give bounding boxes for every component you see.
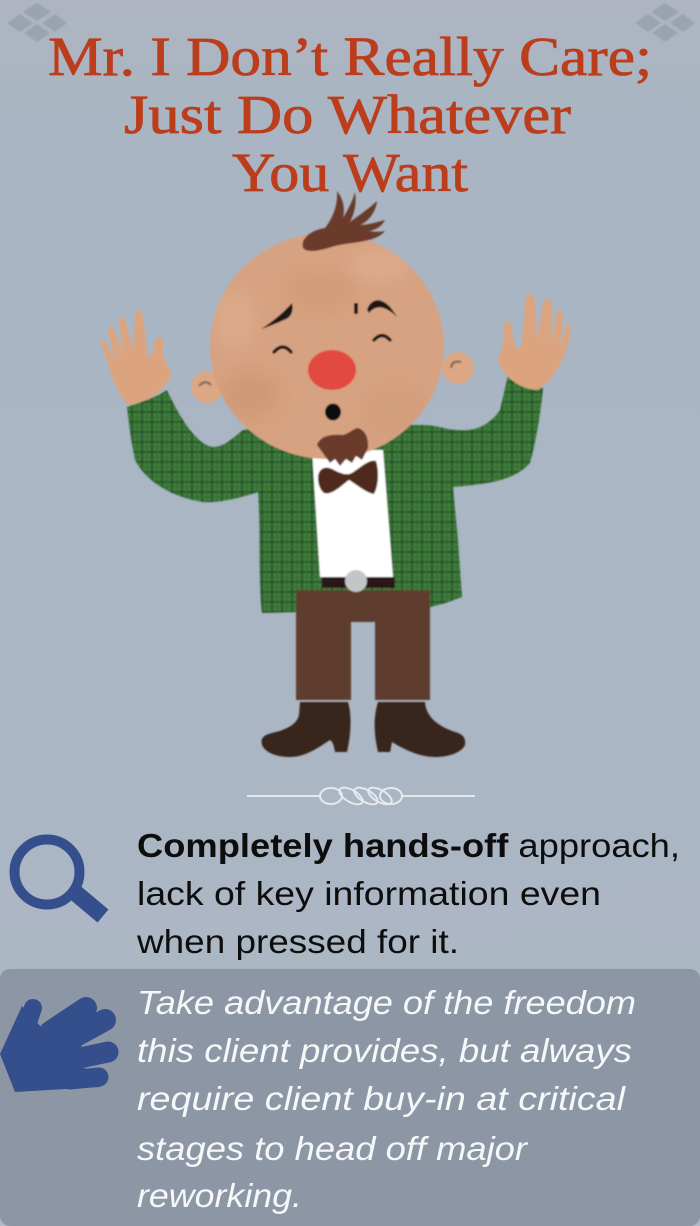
trousers: [296, 590, 430, 700]
belt buckle: [345, 570, 367, 592]
jacket: [127, 375, 543, 613]
description text: lack of key information even: [137, 875, 601, 912]
icon: diamonds top left: [7, 3, 67, 42]
description text: [136, 827, 680, 960]
right boot: [375, 702, 465, 757]
goatee: [317, 428, 368, 466]
title: Mr. I Don’t Really Care;: [48, 26, 652, 87]
icon: magnifying glass: [14, 840, 103, 916]
bow tie: [318, 461, 378, 494]
left boot: [262, 702, 351, 757]
description text: when pressed for it.: [136, 923, 459, 960]
advice text: stages to head off major: [137, 1130, 529, 1167]
divider knot ornament: [247, 784, 475, 808]
description text: Completely hands-off approach,: [137, 827, 680, 864]
title: Just Do Whatever: [124, 84, 571, 145]
belt: [322, 577, 395, 588]
shirt: [312, 450, 393, 577]
head: [210, 233, 444, 459]
left ear: [191, 371, 223, 403]
title: You Want: [232, 142, 468, 203]
advice text: [137, 984, 636, 1214]
advice text: this client provides, but always: [137, 1032, 632, 1069]
advice text: reworking.: [137, 1177, 302, 1214]
advice text: Take advantage of the freedom: [137, 984, 636, 1021]
advice text: require client buy-in at critical: [137, 1080, 627, 1117]
icon: blue hand: [0, 1006, 108, 1092]
character illustration: [100, 191, 571, 757]
title: [48, 26, 652, 203]
mouth: [325, 404, 341, 420]
right ear: [442, 352, 474, 384]
nose: [308, 350, 356, 390]
hair: [303, 191, 385, 251]
left hand: [100, 310, 171, 405]
panel: advice: [0, 969, 700, 1226]
eyebrows: [261, 300, 397, 329]
right hand: [498, 294, 571, 390]
eyes: [274, 336, 390, 352]
icon: diamonds top right: [635, 3, 695, 42]
